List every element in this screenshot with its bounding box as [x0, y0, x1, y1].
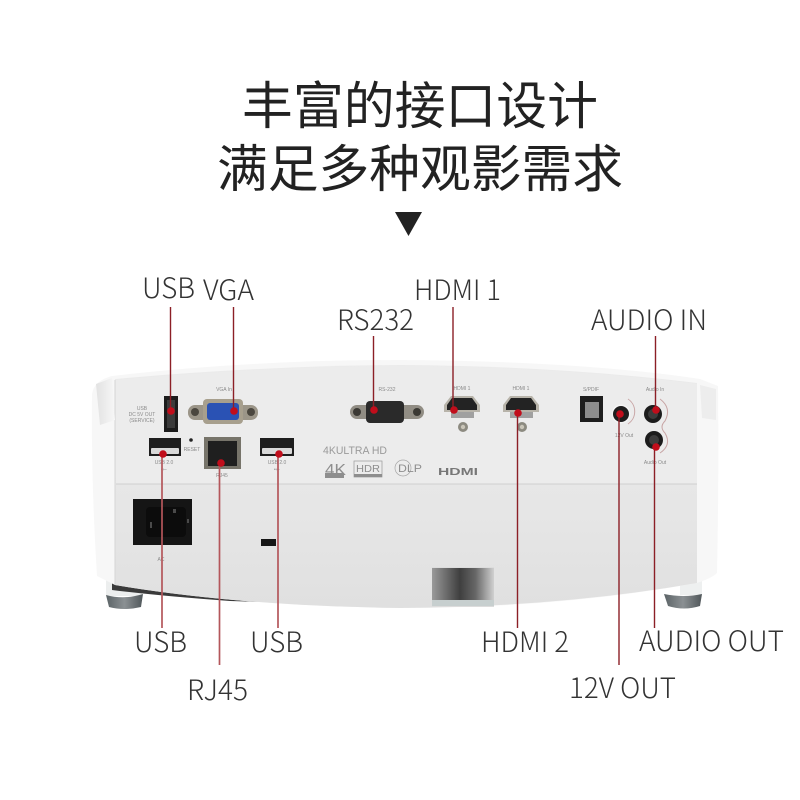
projector rear view [92, 360, 718, 609]
port: USB service: DC 5V OUT [129, 412, 155, 418]
callout: USB right [275, 450, 283, 628]
callout: RS232 [370, 336, 378, 414]
port: USB 2.0 left: USB 2.0 [155, 460, 174, 466]
port: audio in and out [644, 387, 668, 466]
port: USB service [129, 396, 178, 432]
callout: USB left [159, 450, 167, 628]
title: 丰富的接口设计 [242, 65, 598, 139]
logos: 4K Ultra HD, HDR, DLP, HDMI: 4K [325, 462, 346, 479]
label: USB left: USB [134, 621, 187, 661]
callout: AUDIO OUT [652, 443, 660, 628]
port: audio in and out: Audio In [646, 387, 664, 393]
port: HDMI 1 [444, 386, 480, 432]
underside shadow [112, 583, 300, 603]
label: HDMI 1: HDMI 1 [414, 269, 501, 309]
logos: 4K Ultra HD, HDR, DLP, HDMI: DLP [398, 463, 422, 475]
label: USB: USB [142, 267, 195, 307]
port: VGA [188, 387, 258, 424]
callout: VGA [230, 307, 238, 415]
callout: 12V OUT [616, 410, 624, 665]
callout: RJ45 [217, 459, 225, 665]
label: HDMI 2: HDMI 2 [481, 621, 569, 661]
port: USB 2.0 left: •⇽ [161, 467, 167, 473]
label: RJ45: RJ45 [187, 669, 248, 709]
title [217, 65, 623, 202]
port: USB service: (SERVICE) [129, 418, 155, 424]
label: USB right: USB [250, 621, 303, 661]
logos: 4K Ultra HD, HDR, DLP, HDMI: HDR [356, 464, 380, 475]
port: RS232 [350, 387, 424, 423]
port: S/PDIF: S/PDIF [583, 387, 599, 393]
logos: 4K Ultra HD, HDR, DLP, HDMI: 4KULTRA HD [323, 445, 387, 457]
reset button [184, 438, 200, 453]
port: 12V out: 12V Out [615, 433, 634, 439]
callout: HDMI 2 [514, 409, 522, 628]
callout lines and dots [159, 307, 660, 665]
callout: AUDIO IN [652, 336, 660, 414]
logos: 4K Ultra HD, HDR, DLP, HDMI: HDMI [438, 467, 478, 478]
icon: down triangle [395, 212, 422, 236]
port: AC power socket [133, 499, 192, 563]
label: AUDIO OUT: AUDIO OUT [639, 620, 784, 660]
port: USB 2.0 right: •⇽ [274, 467, 280, 473]
port: RS232: RS-232 [379, 387, 396, 393]
port: RJ45 [204, 437, 241, 479]
port: USB 2.0 left [149, 438, 181, 473]
port: USB 2.0 right: USB 2.0 [268, 460, 287, 466]
title: 满足多种观影需求 [217, 128, 623, 202]
port: AC power socket: AC [158, 557, 165, 563]
port: HDMI 1: HDMI 1 [454, 386, 471, 392]
port: RJ45: RJ45 [216, 473, 228, 479]
port: S/PDIF [580, 387, 603, 422]
projector feet [106, 580, 702, 609]
label: 12V OUT: 12V OUT [569, 667, 676, 707]
label: RS232: RS232 [337, 299, 414, 339]
label: AUDIO IN: AUDIO IN [591, 299, 707, 339]
port: USB 2.0 right [260, 438, 294, 473]
port: HDMI 2 [503, 386, 539, 432]
port: USB service: USB [137, 406, 148, 412]
port: 12V out [612, 399, 635, 439]
reset button: RESET [184, 447, 200, 453]
projector body [92, 360, 718, 608]
vent opening [432, 567, 494, 607]
label: VGA: VGA [203, 269, 255, 309]
callout: HDMI 1 [450, 307, 458, 414]
port: VGA: VGA In [216, 387, 232, 393]
security slot [261, 539, 276, 546]
callout: USB service [167, 307, 175, 415]
logos: 4K Ultra HD, HDR, DLP, HDMI [323, 445, 478, 479]
port: HDMI 2: HDMI 1 [513, 386, 530, 392]
port: audio in and out: Audio Out [644, 460, 667, 466]
